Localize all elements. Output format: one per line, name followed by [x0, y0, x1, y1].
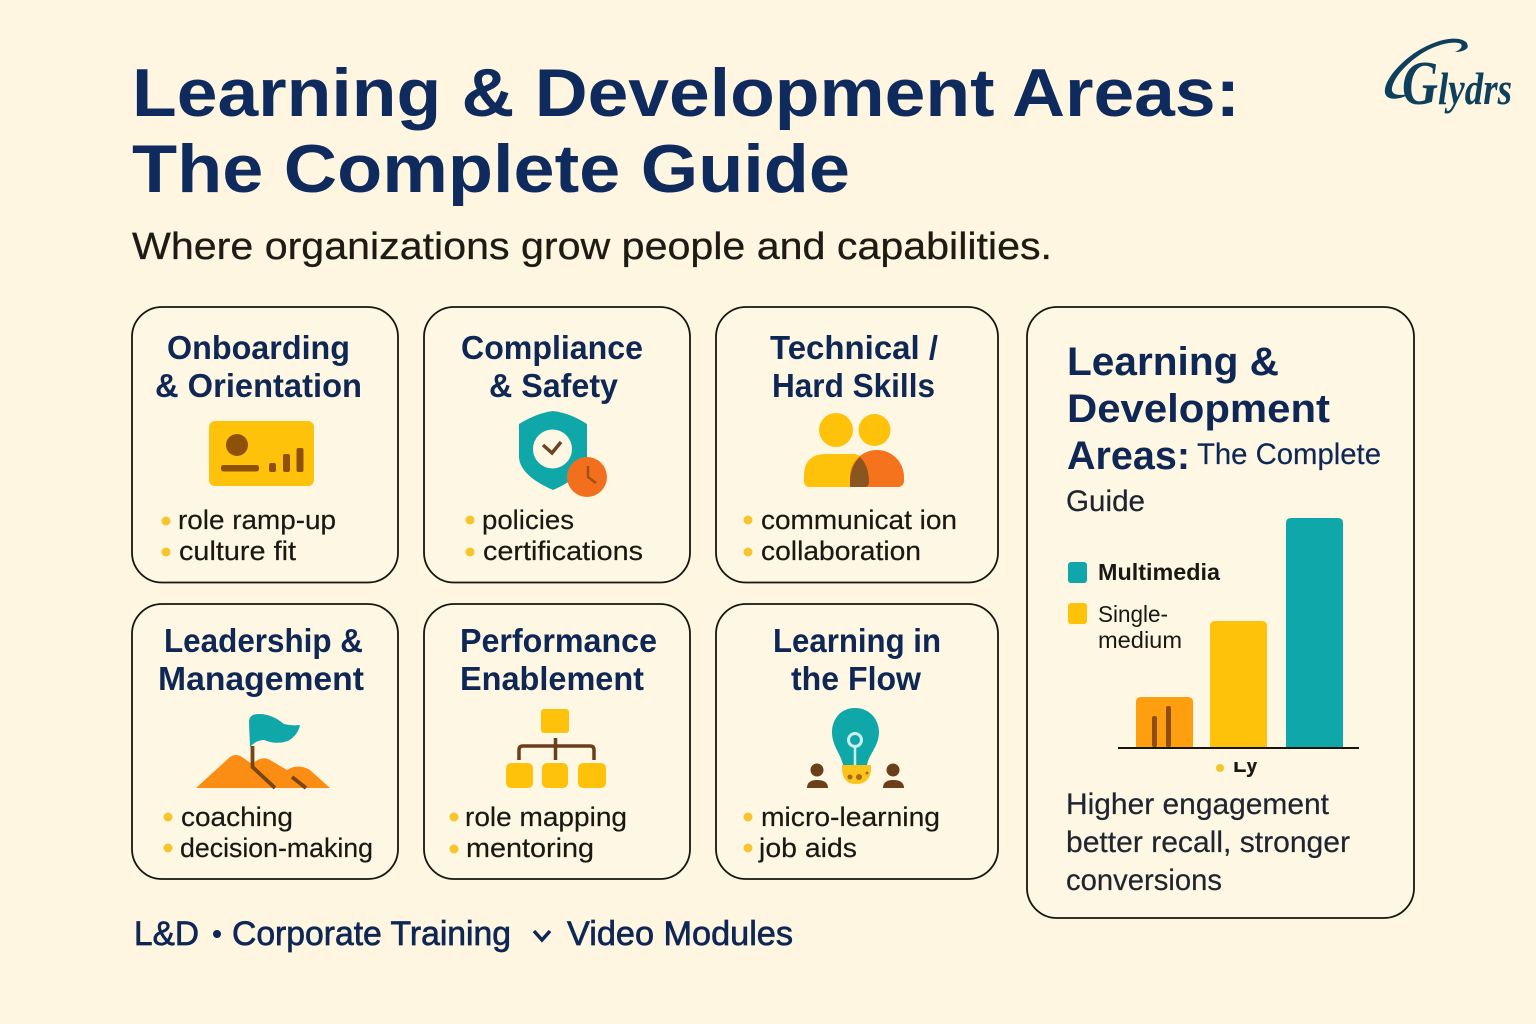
chart legend: medium — [1098, 627, 1182, 653]
bullet list: policies — [482, 505, 574, 535]
bar chart: Ly — [1233, 751, 1258, 777]
bullet list: role ramp-up — [178, 505, 336, 535]
bullet list: decision-making — [180, 833, 373, 863]
heading: onboarding — [155, 329, 362, 404]
heading: compliance: & Safety — [489, 367, 619, 404]
bullet list: job aids — [758, 833, 857, 863]
bullet list — [450, 802, 627, 863]
chart legend — [1068, 559, 1220, 653]
panel heading: The Complete — [1197, 438, 1381, 471]
icon: flag on mountain — [196, 714, 330, 788]
logo: Glydrs: Glydrs — [1402, 50, 1512, 118]
heading: learning in the flow: Learning in — [773, 622, 941, 659]
heading: onboarding: Onboarding — [167, 329, 350, 366]
title — [132, 55, 1240, 207]
bullet list: micro-learning — [761, 802, 940, 832]
heading: technical: Hard Skills — [772, 367, 935, 404]
bullet list — [744, 802, 940, 863]
heading: learning in the flow — [773, 622, 941, 697]
footer tags: Video Modules — [567, 915, 793, 953]
chart legend: Single- — [1098, 601, 1168, 627]
panel: onboarding & orientation — [132, 307, 398, 582]
panel heading: Development — [1067, 387, 1330, 431]
footer tags: L&D — [134, 915, 199, 953]
bullet list — [744, 505, 957, 566]
panel: technical / hard skills — [716, 307, 998, 582]
bullet list: certifications — [483, 536, 643, 566]
bullet list — [164, 802, 373, 863]
heading: performance: Performance — [460, 622, 657, 659]
heading: performance — [460, 622, 657, 697]
panel heading: Areas: — [1067, 434, 1190, 478]
panel: compliance & safety — [424, 307, 690, 582]
heading: technical: Technical / — [770, 329, 938, 366]
bullet list — [162, 505, 336, 566]
heading: leadership — [158, 622, 364, 697]
footer tags — [134, 915, 793, 953]
panel: leadership & management — [132, 604, 398, 879]
panel: multimedia comparison — [1027, 307, 1414, 918]
heading: compliance: Compliance — [461, 329, 643, 366]
heading: performance: Enablement — [460, 660, 644, 697]
panel takeaway text: conversions — [1066, 864, 1222, 897]
heading: compliance — [461, 329, 643, 404]
logo: Glydrs — [1385, 39, 1512, 118]
icon: shield with clock — [519, 411, 607, 497]
bullet list: coaching — [181, 802, 293, 832]
bullet list: culture fit — [179, 536, 297, 566]
title: The Complete Guide — [132, 131, 850, 207]
heading: onboarding: & Orientation — [155, 367, 362, 404]
heading: leadership: Leadership & — [164, 622, 363, 659]
bullet list: communicat ion — [761, 505, 957, 535]
panel heading: Guide — [1066, 485, 1145, 518]
bullet list: mentoring — [466, 833, 594, 863]
icon: org chart — [506, 709, 606, 788]
panel heading — [1066, 340, 1381, 518]
title: Learning & Development Areas: — [132, 55, 1240, 131]
heading: technical — [770, 329, 938, 404]
panel takeaway text: Higher engagement — [1066, 788, 1330, 821]
heading: learning in the flow: the Flow — [791, 660, 921, 697]
panel takeaway text: better recall, stronger — [1066, 826, 1350, 859]
heading: leadership: Management — [158, 660, 364, 697]
footer tags: Corporate Training — [232, 915, 511, 953]
bar chart — [1118, 518, 1359, 777]
icon: id card with bars — [209, 421, 314, 486]
panel takeaway text — [1066, 788, 1350, 897]
chart legend: Multimedia — [1098, 559, 1220, 585]
icon: two people — [804, 413, 904, 487]
panel: learning in the flow — [716, 604, 998, 879]
panel heading: Learning & — [1067, 340, 1279, 384]
bullet list — [466, 505, 643, 566]
subtitle: Where organizations grow people and capabilities. — [132, 226, 1052, 268]
panel: performance enablement — [424, 604, 690, 879]
bullet list: role mapping — [465, 802, 627, 832]
bullet list: collaboration — [761, 536, 921, 566]
icon: light bulb with people — [807, 708, 904, 788]
